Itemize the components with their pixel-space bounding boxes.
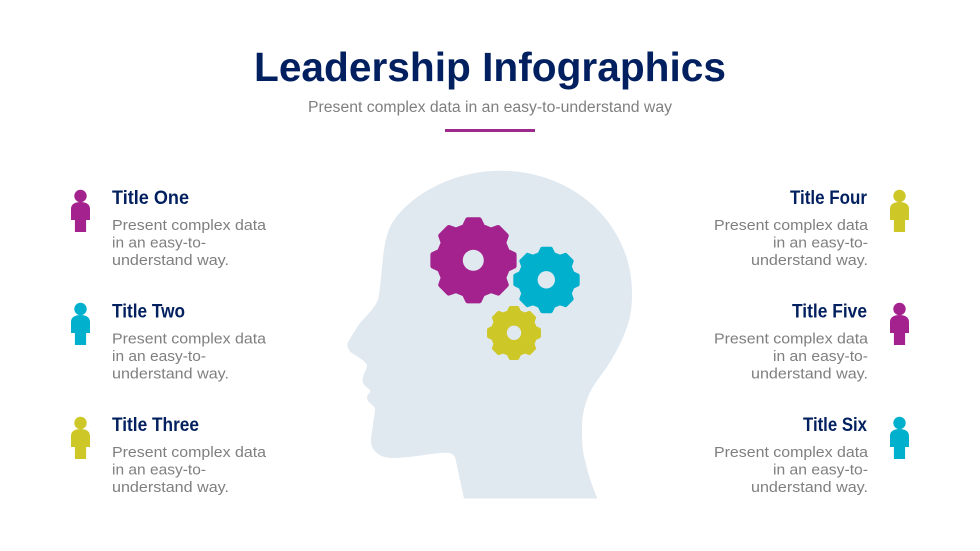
- item: title six: in an easy-to-: [773, 462, 868, 478]
- subtitle: Present complex data in an easy-to-understand way: [308, 99, 672, 116]
- item: title two: in an easy-to-: [112, 348, 206, 365]
- item: title three: [71, 415, 267, 496]
- title: Leadership Infographics: [254, 44, 726, 90]
- item: title three: understand way.: [112, 479, 229, 496]
- item: title one: in an easy-to-: [112, 234, 206, 252]
- item: title five: in an easy-to-: [773, 348, 868, 365]
- item: title four: [714, 188, 909, 269]
- item: title six: Title Six: [803, 415, 867, 436]
- icon: person teal: [890, 417, 909, 459]
- item: title one: Present complex data: [112, 217, 267, 234]
- gear: purple: [433, 220, 514, 301]
- item: title four: Present complex data: [714, 217, 869, 234]
- icon: person purple: [890, 303, 909, 345]
- item: title four: understand way.: [751, 252, 868, 269]
- icon: person purple: [71, 190, 90, 232]
- head silhouette: [347, 171, 632, 498]
- item: title four: Title Four: [790, 188, 868, 209]
- gear: teal: [515, 249, 578, 311]
- item: title three: Present complex data: [112, 444, 267, 461]
- item: title four: in an easy-to-: [773, 234, 868, 252]
- item: title one: [71, 188, 267, 269]
- item: title six: [714, 415, 909, 496]
- item: title three: in an easy-to-: [112, 462, 206, 478]
- title underline: [445, 129, 535, 132]
- item: title one: understand way.: [112, 252, 229, 269]
- item: title five: [714, 302, 909, 382]
- item: title five: understand way.: [751, 366, 868, 382]
- item: title five: Title Five: [792, 302, 867, 322]
- item: title six: understand way.: [751, 479, 868, 496]
- icon: person yellow: [890, 190, 909, 232]
- item: title two: Title Two: [112, 302, 185, 322]
- item: title two: [71, 302, 267, 382]
- item: title six: Present complex data: [714, 444, 869, 461]
- item: title one: Title One: [112, 188, 189, 209]
- icon: person yellow: [71, 417, 90, 459]
- item: title two: Present complex data: [112, 330, 267, 348]
- item: title two: understand way.: [112, 366, 229, 382]
- gear: yellow: [489, 308, 539, 358]
- item: title three: Title Three: [112, 415, 199, 436]
- icon: person teal: [71, 303, 90, 345]
- item: title five: Present complex data: [714, 330, 869, 348]
